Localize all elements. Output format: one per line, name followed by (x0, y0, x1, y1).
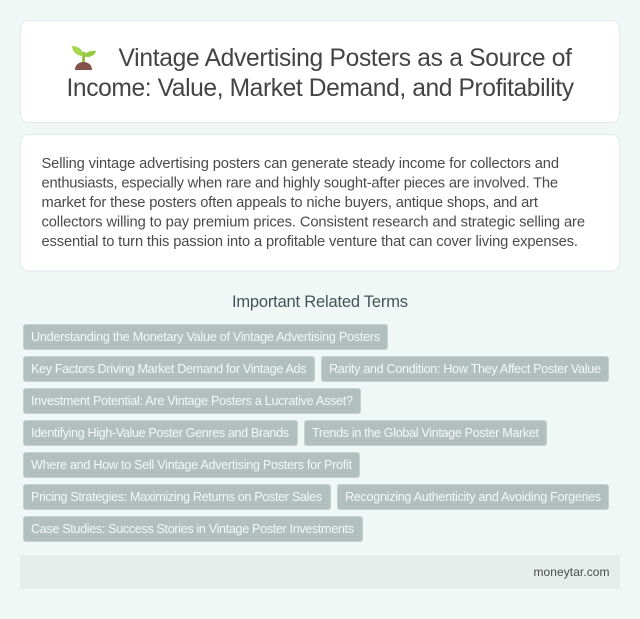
tag 6: Trends in the Global Vintage Poster Market (312, 426, 540, 440)
paragraph text: enthusiasts, especially when rare and highly sought-after pieces are involved. The (42, 176, 558, 192)
footer bar (20, 555, 620, 589)
paragraph text: Selling vintage advertising posters can generate steady income for collectors and (42, 156, 559, 172)
tag 8 (24, 484, 330, 510)
tag 9: Recognizing Authenticity and Avoiding Forgeries (345, 490, 601, 504)
tag 5: Identifying High-Value Poster Genres and Brands (31, 426, 289, 440)
tag 4 (24, 388, 360, 414)
tag 1: Understanding the Monetary Value of Vintage Advertising Posters (31, 330, 380, 344)
icon: seedling (72, 46, 96, 70)
tag 1 (24, 324, 388, 350)
paragraph text: market for these posters often appeals to niche buyers, antique shops, and art (42, 195, 538, 211)
paragraph text: essential to turn this passion into a profitable venture that can cover living expenses. (42, 234, 578, 250)
tag 3 (322, 356, 608, 382)
paragraph text: collectors willing to pay premium prices. Consistent research and strategic selling are (42, 214, 585, 230)
footer source text: moneytar.com (534, 565, 610, 579)
tag 7: Where and How to Sell Vintage Advertising Posters for Profit (31, 458, 352, 472)
tag 3: Rarity and Condition: How They Affect Poster Value (329, 362, 601, 376)
heading: important related terms: Important Related Terms (232, 293, 408, 311)
tag 2: Key Factors Driving Market Demand for Vintage Ads (31, 362, 306, 376)
paragraph text (42, 156, 585, 250)
title line 2: Income: Value, Market Demand, and Profitability (66, 75, 575, 102)
tag 4: Investment Potential: Are Vintage Posters a Lucrative Asset? (31, 394, 353, 408)
panel: title card (20, 20, 620, 122)
tag 6 (304, 420, 546, 446)
tag 10 (24, 516, 362, 542)
tag list (24, 324, 608, 542)
title line 1: Vintage Advertising Posters as a Source of (118, 45, 572, 72)
tag 10: Case Studies: Success Stories in Vintage Poster Investments (31, 522, 354, 536)
tag 2 (24, 356, 314, 382)
panel: summary paragraph (20, 134, 620, 271)
tag 8: Pricing Strategies: Maximizing Returns on Poster Sales (31, 490, 322, 504)
tag 9 (338, 484, 608, 510)
tag 5 (24, 420, 298, 446)
tag 7 (24, 452, 360, 478)
